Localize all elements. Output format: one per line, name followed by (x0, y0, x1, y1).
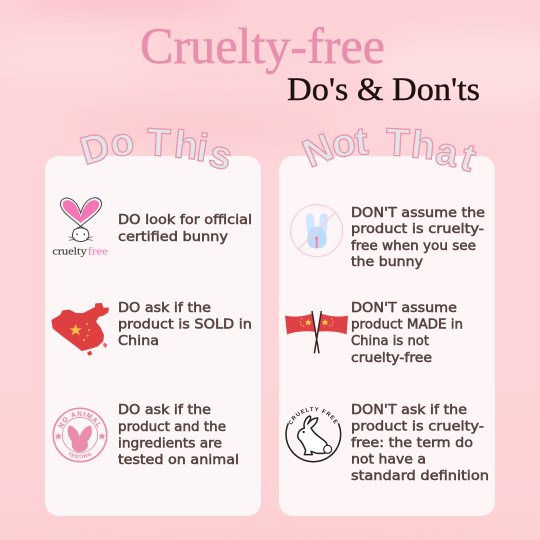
subtitle: Do's & Don'ts: Do's & Don'ts (287, 72, 480, 108)
text: sold in china (118, 300, 252, 349)
text: made in china: China is not (351, 333, 429, 349)
text: no standard definition: DON'T ask if the (351, 402, 467, 418)
icon: cruelty free bunny logo (52, 198, 108, 258)
text: official bunny: DO look for official (118, 212, 252, 228)
icon: crossed out bunny (291, 205, 343, 257)
text: assume bunny (351, 205, 485, 270)
title: Cruelty-free: Cruelty-free (140, 19, 385, 75)
text: no standard definition: free: the term do (351, 435, 473, 451)
icon: cruelty free bunny logo: free (88, 246, 108, 258)
text: made in china: cruelty-free (351, 350, 432, 366)
icon: cruelty free bunny logo: cruelty (52, 246, 87, 258)
text: assume bunny: DON'T assume the (351, 205, 485, 221)
text: assume bunny: free when you see (351, 238, 476, 254)
icon: no animal testing stamp (52, 408, 108, 462)
text: tested on animal: product and the (118, 419, 226, 435)
text: tested on animal (118, 402, 239, 468)
text: made in china (351, 300, 463, 366)
heading: do this: i (194, 126, 211, 171)
text: official bunny: certified bunny (118, 229, 228, 245)
heading: do this: h (172, 123, 200, 168)
heading: do this: T (146, 121, 172, 165)
text: no standard definition: not have a (351, 452, 426, 468)
heading: not that: a (432, 130, 462, 176)
heading: not that: T (385, 121, 411, 165)
text: made in china: DON'T assume (351, 300, 457, 316)
text: made in china: product MADE in (351, 316, 463, 332)
icon: china map (51, 303, 109, 356)
text: no standard definition: product is cruelty- (351, 418, 484, 434)
heading: not that: t (353, 120, 370, 164)
heading: not that: o (328, 120, 359, 167)
text: sold in china: product is SOLD in (118, 316, 252, 332)
title (140, 19, 480, 108)
text: no standard definition (351, 402, 489, 484)
heading: not that: N (297, 126, 339, 176)
icon: no animal testing stamp: TESTING (68, 452, 92, 458)
text: tested on animal: DO ask if the (118, 402, 211, 418)
text: tested on animal: ingredients are (118, 436, 222, 452)
heading: not that: h (409, 123, 437, 168)
text: sold in china: DO ask if the (118, 300, 211, 316)
text: sold in china: China (118, 333, 159, 349)
icon: no animal testing stamp: NO ANIMAL (58, 411, 100, 428)
text: official bunny (118, 212, 252, 245)
text: no standard definition: standard definition (351, 468, 489, 484)
icon: cruelty free rabbit badge: CRUELTY FREE (288, 407, 338, 424)
panel: not that (279, 156, 495, 516)
text: assume bunny: the bunny (351, 254, 423, 270)
heading: do this: D (76, 125, 115, 174)
icon: crossed china flags (285, 311, 348, 353)
heading: not that: t (455, 136, 481, 181)
heading: do this (76, 120, 237, 179)
heading: not that (297, 120, 481, 181)
icon: cruelty free rabbit badge (285, 407, 342, 462)
heading: do this: s (205, 132, 237, 179)
text: tested on animal: tested on animal (118, 452, 239, 468)
panel: do this (45, 156, 261, 516)
text: assume bunny: product is cruelty- (351, 221, 484, 237)
heading: do this: o (107, 120, 137, 166)
